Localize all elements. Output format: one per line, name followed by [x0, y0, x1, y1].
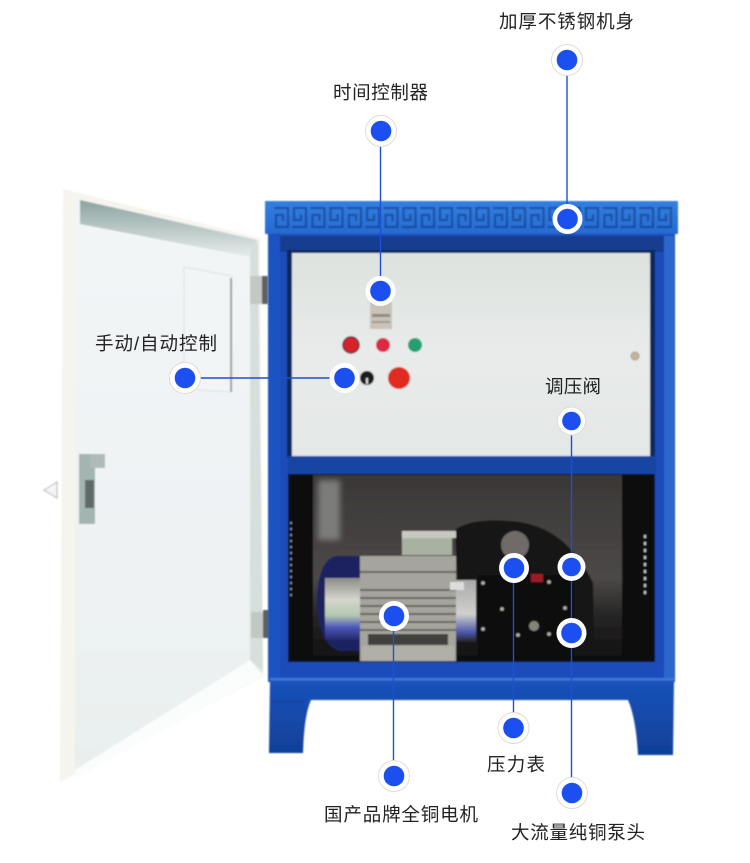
- marker: motor bottom: [378, 760, 410, 792]
- base: [269, 680, 674, 755]
- label: manual/auto control: 手动/自动控制: [95, 333, 217, 354]
- marker: manual auto: [330, 363, 360, 393]
- marker: motor: [379, 601, 409, 631]
- upper hinge: [250, 276, 268, 304]
- cabinet: blue machine body: [265, 201, 678, 755]
- label: copper motor: 国产品牌全铜电机: [324, 804, 478, 825]
- motor: [317, 531, 476, 661]
- marker: pressure gauge bottom: [498, 712, 529, 744]
- marker: manual auto left: [170, 362, 200, 394]
- indicator lights: [343, 337, 422, 353]
- time controller: [370, 302, 392, 329]
- door document pocket: [184, 267, 232, 392]
- top decorative band: [265, 201, 678, 234]
- marker: pressure valve: [558, 553, 586, 581]
- marker: pump: [556, 618, 586, 648]
- label: copper pump head: 大流量纯铜泵头: [511, 822, 645, 843]
- marker: timer top: [366, 116, 396, 146]
- lower cavity: [288, 474, 655, 662]
- door latch: [79, 454, 105, 524]
- label: pressure valve: 调压阀: [545, 376, 601, 397]
- marker: timer: [366, 276, 396, 306]
- label: time controller: 时间控制器: [333, 82, 428, 103]
- middle bar: [288, 456, 656, 474]
- door handle tip: [44, 482, 57, 498]
- marker: pump bottom: [556, 778, 588, 808]
- cabinet frame: [268, 232, 675, 682]
- selector knob: [360, 371, 374, 385]
- marker: pressure valve top: [558, 407, 586, 435]
- label: thickened stainless body: 加厚不锈钢机身: [499, 11, 634, 32]
- marker: stainless body top: [552, 44, 582, 76]
- marker: pressure gauge: [499, 553, 529, 583]
- connector lines: [185, 60, 572, 793]
- control panel: [287, 250, 655, 458]
- marker: stainless body: [552, 204, 582, 234]
- door: open cabinet door: [44, 189, 269, 782]
- label: pressure gauge: 压力表: [487, 754, 545, 775]
- pump and pressure gauge: [478, 531, 574, 660]
- stop button: [388, 367, 410, 389]
- lower hinge: [251, 610, 269, 638]
- panel screw: [631, 352, 639, 360]
